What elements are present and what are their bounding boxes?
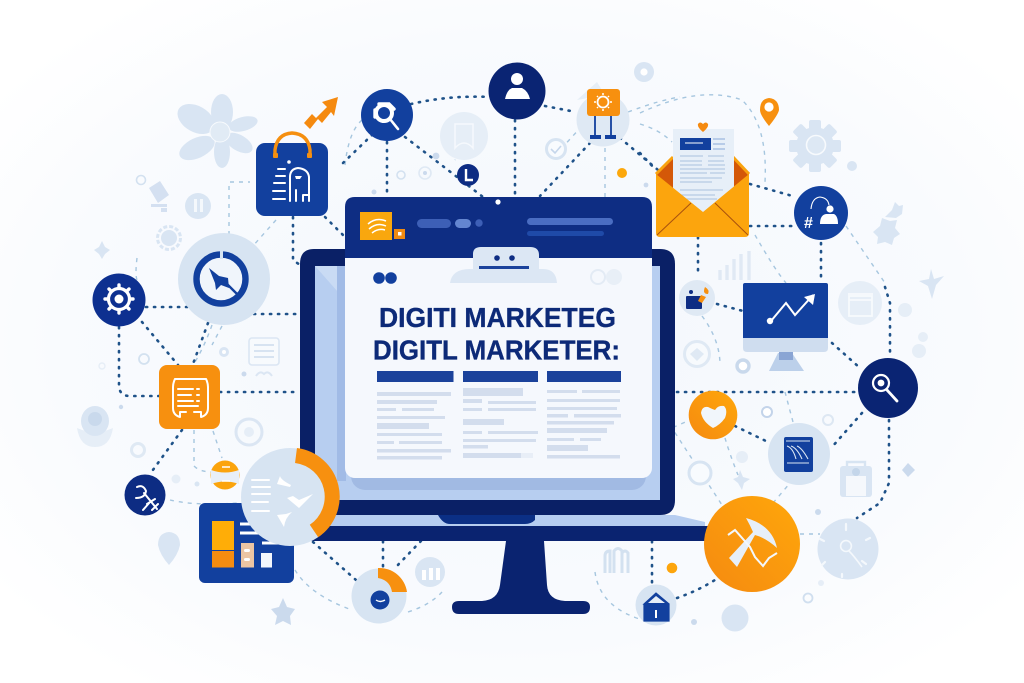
pale toggle xyxy=(591,269,622,285)
icon: hammer circle xyxy=(704,496,800,592)
icon: search gear circle xyxy=(361,89,413,141)
icon: pale store xyxy=(838,281,882,325)
bar: peach xyxy=(241,543,254,568)
bar: white xyxy=(261,553,272,568)
icon: pale diamond xyxy=(902,463,915,477)
icon: trend monitor xyxy=(743,283,828,371)
icon: pale dots right xyxy=(898,303,928,358)
card lines xyxy=(240,524,280,543)
envelope front xyxy=(656,174,749,237)
laptop frame xyxy=(300,249,675,515)
icon: pale bag right xyxy=(840,462,872,497)
title: DIGITL MARKETER: xyxy=(373,334,620,366)
icon: pale ring chat xyxy=(689,451,750,490)
icon: orange dot xyxy=(667,563,677,573)
icon: pale cog xyxy=(158,226,180,250)
column 3 text lines xyxy=(547,390,621,458)
window shadow xyxy=(351,440,646,490)
icon: pale bottom circles xyxy=(691,580,824,632)
icon: pale sync ring xyxy=(236,419,262,445)
icon: envelope xyxy=(656,122,749,237)
icon: hash person circle: # xyxy=(804,215,813,232)
icon: small pale rings xyxy=(372,153,648,194)
icon: shopping bag xyxy=(256,133,328,216)
column 1 text lines xyxy=(377,392,451,460)
chart card xyxy=(199,503,294,583)
icon: orange arrow xyxy=(304,97,338,129)
icon: user circle xyxy=(488,62,546,120)
icon: amber dot top xyxy=(617,168,627,178)
laptop xyxy=(300,249,718,614)
laptop base bar xyxy=(310,526,718,541)
icon: heart circle xyxy=(689,391,737,439)
icon: orange map pin xyxy=(760,98,779,126)
icon: house circle xyxy=(636,584,676,626)
envelope back xyxy=(656,157,749,200)
icon: pale sync circle right xyxy=(684,342,710,366)
bar: amber and orange xyxy=(212,521,234,568)
browser window xyxy=(345,197,652,478)
icon: document circle xyxy=(768,423,830,485)
icon: pale star bottom xyxy=(271,598,295,625)
icon: orange document xyxy=(159,365,220,429)
icon: sign circle xyxy=(576,82,630,146)
icon: pale dot xyxy=(847,161,857,171)
icon: small symbol circle xyxy=(124,474,166,516)
icon: pale check ring xyxy=(546,140,566,158)
icon: pale top circle with frame xyxy=(440,112,488,160)
monitor stand xyxy=(452,541,590,614)
icon: pale star left xyxy=(94,241,110,259)
icon: pale map pin xyxy=(158,532,180,565)
column 2 text lines xyxy=(463,388,538,458)
icon: pale in circle xyxy=(415,557,445,587)
webcam tab xyxy=(450,247,557,283)
title xyxy=(373,302,620,366)
icon: pale clock xyxy=(815,509,878,580)
icon: pale person xyxy=(77,406,113,447)
laptop lower deck xyxy=(315,515,705,526)
network connectors xyxy=(119,95,890,622)
icon: pale box cluster xyxy=(136,176,169,212)
icon: pale info circle xyxy=(185,193,211,219)
icon: pale gear xyxy=(789,120,841,172)
icon: large pie circle xyxy=(241,448,339,546)
nav pills xyxy=(417,218,613,236)
column headers xyxy=(377,371,621,382)
icon: pale paperclip xyxy=(605,548,628,573)
icon: pale burst xyxy=(873,202,903,245)
icon: pale rings right xyxy=(737,360,833,425)
icon: compass circle xyxy=(178,233,270,325)
icon: bottom pie circle xyxy=(352,568,407,624)
icon: L circle xyxy=(457,164,479,186)
icon: hash person circle xyxy=(794,186,848,240)
laptop screen xyxy=(315,266,660,500)
icon: pale ring top xyxy=(634,62,654,82)
icon: pale signal bars xyxy=(720,251,749,280)
icon: small person circle xyxy=(679,280,715,316)
letter xyxy=(673,129,734,219)
background pale icons xyxy=(77,62,944,632)
window body xyxy=(345,197,652,478)
logo square xyxy=(360,212,405,240)
icon: magnifier circle xyxy=(858,358,918,418)
title: DIGITI MARKETEG xyxy=(379,302,616,333)
camera dot xyxy=(495,199,501,205)
icon: gear circle xyxy=(92,274,146,326)
window dots xyxy=(373,272,397,284)
icon: heart xyxy=(698,122,708,132)
icon: orange hourglass xyxy=(210,460,240,490)
icon: pale flower xyxy=(172,94,259,168)
icon: pale notes xyxy=(219,338,279,376)
icon: pale rings left xyxy=(99,354,200,486)
window header xyxy=(345,197,652,258)
icon: pale star right xyxy=(919,269,944,299)
laptop notch xyxy=(438,515,535,524)
